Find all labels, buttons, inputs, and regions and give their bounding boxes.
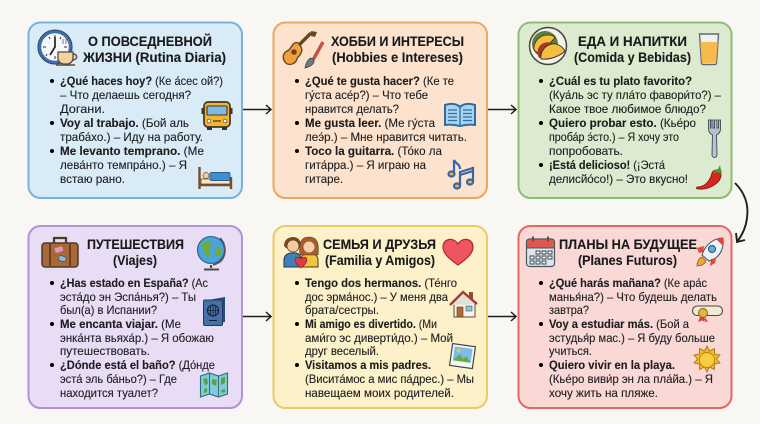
icon: rocket bbox=[697, 238, 724, 266]
text block: travel phrases: находится туалет? bbox=[60, 386, 158, 400]
panel: future plans bbox=[518, 226, 732, 408]
text block: future phrases: манья́на?) – Что будешь делать bbox=[549, 290, 717, 304]
arrow: hobbies to food bbox=[488, 105, 516, 114]
panel: travel bbox=[28, 226, 242, 408]
text block: family phrases: Mi amigo es divertido. (Ми bbox=[305, 317, 437, 331]
panel: hobbies bbox=[274, 22, 487, 198]
text block: future phrases: (Кье́ро виви́р эн ла пла́йа.) – Я bbox=[549, 372, 713, 386]
text block: travel phrases: энка́нта вьяха́р.) – Я обожаю bbox=[60, 331, 214, 345]
text block: family phrases: Tengo dos hermanos. (Те́нго bbox=[305, 276, 457, 290]
heading: hobbies bbox=[331, 34, 464, 65]
icon: landscape photo bbox=[450, 344, 475, 369]
heading: future plans: (Planes Futuros) bbox=[578, 253, 677, 268]
text block: travel phrases: путешествовать. bbox=[60, 344, 150, 358]
text block: future phrases bbox=[539, 276, 717, 400]
text block: future phrases: Voy a estudiar más. (Бой а bbox=[549, 317, 689, 331]
text block: family phrases: ами́го эс диверти́до.) – Мой bbox=[305, 331, 453, 345]
text block: travel phrases: был(а) в Испании? bbox=[60, 303, 157, 317]
icon: calendar bbox=[526, 236, 554, 266]
heading: future plans bbox=[559, 237, 697, 268]
heading: future plans: ПЛАНЫ НА БУДУЩЕЕ bbox=[559, 237, 697, 252]
heading: travel: (Viajes) bbox=[113, 253, 157, 268]
panel: food and drinks bbox=[518, 22, 732, 198]
text block: future phrases: эстудья́р мас.) – Я буду больше bbox=[549, 331, 715, 345]
text block: travel phrases: ¿Dónde está el baño? (До́нде bbox=[60, 358, 215, 372]
icon: map bbox=[200, 373, 228, 397]
text block: hobbies phrases: гитаре. bbox=[305, 172, 343, 186]
text block: future phrases: учиться. bbox=[549, 344, 592, 358]
text block: food phrases: Какое твое любимое блюдо? bbox=[549, 102, 706, 116]
icon: diploma scroll bbox=[692, 306, 722, 322]
text block: hobbies phrases: нравится делать? bbox=[305, 102, 399, 116]
text block: travel phrases: эста́до эн Эспа́нья?) – Ты bbox=[60, 290, 196, 304]
text block: hobbies phrases: Toco la guitarra. (То́ко ла bbox=[305, 144, 442, 158]
text block: family phrases: брата/сестры. bbox=[305, 303, 379, 317]
icon: fork bbox=[708, 120, 720, 158]
heading: food and drinks bbox=[574, 34, 691, 65]
icon: heart bbox=[443, 239, 473, 265]
text block: future phrases: ¿Qué harás mañana? (Ке ара́с bbox=[549, 276, 707, 290]
text block: daily routine phrases: – Что делаешь сегодня? bbox=[60, 88, 191, 102]
text block: food phrases: ¡Está delicioso! (¡Эста́ bbox=[549, 158, 665, 172]
text block: family phrases: друг веселый. bbox=[305, 344, 379, 358]
text block: hobbies phrases: гита́рра.) – Я играю на bbox=[305, 158, 426, 172]
text block: food phrases: делисйо́со!) – Это вкусно! bbox=[549, 172, 688, 186]
text block: travel phrases: ¿Has estado en España? (Ас bbox=[60, 276, 208, 290]
icon: passport bbox=[204, 297, 225, 326]
text block: family phrases: Visitamos a mis padres. bbox=[305, 358, 431, 372]
text block: future phrases: Quiero vivir en la playa. bbox=[549, 358, 675, 372]
text block: family phrases: дос эрма́нос.) – У меня два bbox=[305, 290, 448, 304]
text block: hobbies phrases: ¿Qué te gusta hacer? (Ке те bbox=[305, 74, 454, 88]
text block: food phrases: проба́р э́сто.) – Я хочу это bbox=[549, 130, 679, 144]
icon: open book bbox=[445, 104, 475, 126]
text block: future phrases: хочу жить на пляже. bbox=[549, 386, 658, 400]
icon: guitar and paintbrush bbox=[283, 31, 323, 68]
text block: daily routine phrases: траба́хо.) – Иду на работу. bbox=[60, 130, 203, 144]
icon: house bbox=[450, 292, 477, 317]
heading: family and friends: (Familia y Amigos) bbox=[325, 253, 435, 268]
arrow: family to future plans bbox=[488, 312, 516, 321]
heading: travel: ПУТЕШЕСТВИЯ bbox=[87, 237, 184, 252]
text block: food phrases: попробовать. bbox=[549, 144, 623, 158]
heading: family and friends: СЕМЬЯ И ДРУЗЬЯ bbox=[323, 237, 436, 252]
text block: travel phrases bbox=[50, 276, 215, 400]
text block: daily routine phrases bbox=[50, 74, 223, 186]
icon: glass of juice bbox=[700, 34, 718, 64]
text block: food phrases: Quiero probar esto. (Кье́ро bbox=[549, 116, 696, 130]
text block: daily routine phrases: лева́нто темпра́но.) – Я bbox=[60, 158, 187, 172]
arrow: travel to family bbox=[243, 312, 271, 321]
text block: family phrases: навещаем моих родителей. bbox=[305, 386, 454, 400]
text block: future phrases: завтра? bbox=[549, 303, 589, 317]
text block: hobbies phrases: Me gusta leer. (Ме гу́ста bbox=[305, 116, 435, 130]
text block: travel phrases: эста́ эль ба́ньо?) – Где bbox=[60, 372, 177, 386]
text block: daily routine phrases: встаю рано. bbox=[60, 172, 125, 186]
heading: family and friends bbox=[323, 237, 436, 268]
arrow: food down to future plans bbox=[735, 183, 747, 242]
arrow: routine to hobbies bbox=[243, 105, 271, 114]
text block: hobbies phrases bbox=[295, 74, 467, 186]
icon: tacos on plate bbox=[530, 28, 566, 64]
heading: hobbies: (Hobbies e Intereses) bbox=[332, 50, 463, 65]
text block: daily routine phrases: Me levanto temprano. (Ме bbox=[60, 144, 204, 158]
icon: bed bbox=[200, 167, 231, 189]
icon: sun bbox=[694, 346, 720, 372]
icon: globe bbox=[198, 236, 225, 270]
icon: suitcase bbox=[42, 238, 78, 267]
heading: travel bbox=[87, 237, 184, 268]
text block: family phrases bbox=[295, 276, 474, 400]
text block: daily routine phrases: Догани. bbox=[60, 102, 105, 116]
panel: family and friends bbox=[274, 226, 487, 408]
icon: couple with heart bbox=[284, 237, 318, 268]
text block: travel phrases: Me encanta viajar. (Ме bbox=[60, 317, 181, 331]
heading: daily routine: ЖИЗНИ (Rutina Diaria) bbox=[82, 50, 226, 65]
heading: food and drinks: (Comida y Bebidas) bbox=[574, 50, 691, 65]
text block: daily routine phrases: ¿Qué haces hoy? (Ке а́сес ой?) bbox=[60, 74, 223, 88]
icon: music notes bbox=[448, 160, 473, 188]
heading: hobbies: ХОББИ И ИНТЕРЕСЫ bbox=[331, 34, 464, 49]
text block: food phrases: ¿Cuál es tu plato favorito? bbox=[549, 74, 692, 88]
heading: food and drinks: ЕДА И НАПИТКИ bbox=[578, 34, 687, 49]
text block: hobbies phrases: леэ́р.) – Мне нравится читать. bbox=[305, 130, 467, 144]
text block: daily routine phrases: Voy al trabajo. (Бой аль bbox=[60, 116, 189, 130]
icon: clock and coffee cup bbox=[38, 30, 77, 65]
panel: daily routine bbox=[28, 22, 242, 198]
icon: chili pepper bbox=[696, 165, 722, 189]
heading: daily routine: О ПОВСЕДНЕВНОЙ bbox=[88, 34, 212, 49]
text block: family phrases: (Висита́мос а мис па́дрес.) – Мы bbox=[305, 372, 474, 386]
icon: bus bbox=[202, 102, 232, 130]
heading: daily routine bbox=[82, 34, 226, 65]
text block: food phrases: (Куа́ль эс ту пла́то фавори́то?) – bbox=[549, 88, 721, 102]
text block: hobbies phrases: гу́ста асе́р?) – Что тебе bbox=[305, 88, 428, 102]
text block: food phrases bbox=[539, 74, 721, 186]
